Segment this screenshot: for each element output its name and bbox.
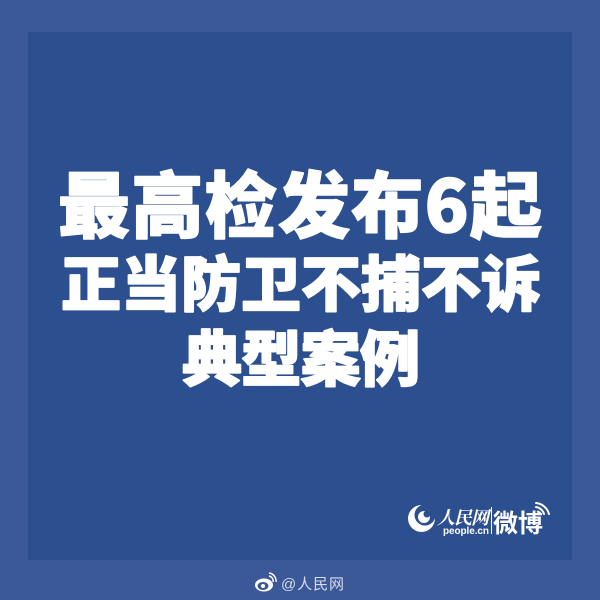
logo text: 微博: 微博 xyxy=(493,504,543,540)
watermark text: @人民网 xyxy=(281,576,344,593)
logo text: people.cn: people.cn xyxy=(443,526,489,537)
heading line 3: 典型案例 xyxy=(182,312,420,399)
heading line 2: 正当防卫不捕不诉 xyxy=(61,237,541,324)
logo divider xyxy=(491,507,492,534)
icon: signal waves xyxy=(536,503,549,514)
title xyxy=(58,148,542,399)
panel: inner blue square xyxy=(28,32,572,560)
icon: weibo xyxy=(255,573,276,592)
logo text: 人民网: 人民网 xyxy=(437,504,492,530)
watermark xyxy=(255,573,344,593)
icon: people.cn globe xyxy=(408,504,436,532)
logo: people.cn weibo xyxy=(408,503,549,540)
heading line 1: 最高检发布6起 xyxy=(58,148,542,253)
